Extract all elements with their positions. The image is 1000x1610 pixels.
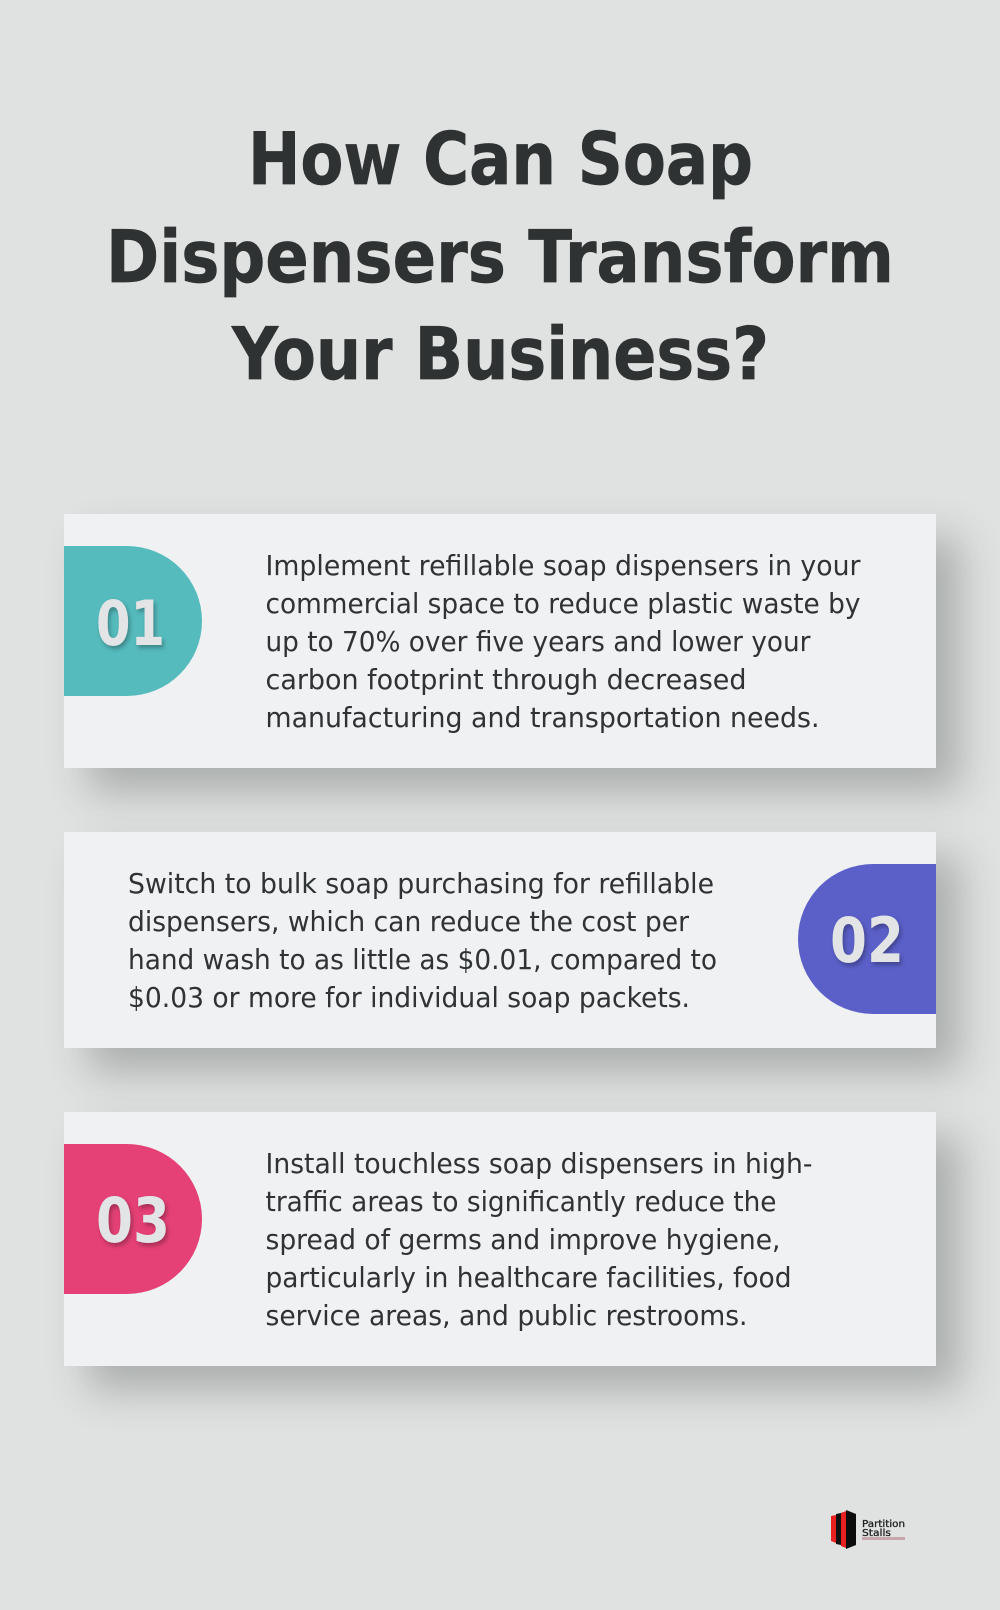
logo: Partition Stalls: Partition xyxy=(862,1519,905,1530)
title xyxy=(106,117,894,396)
text block 2: $0.03 or more for individual soap packets. xyxy=(128,981,690,1014)
badge 03: 03 xyxy=(96,1184,170,1257)
panel: card 3 xyxy=(64,1112,936,1366)
badge 02: 02 xyxy=(830,904,904,977)
text block 3: Install touchless soap dispensers in high- xyxy=(266,1147,812,1180)
text block 2 xyxy=(128,867,717,1014)
text block 1: manufacturing and transportation needs. xyxy=(266,701,820,734)
text block 1: carbon footprint through decreased xyxy=(266,663,746,696)
title: How Can Soap xyxy=(248,117,753,201)
text block 2: dispensers, which can reduce the cost per xyxy=(128,905,689,938)
badge 01 xyxy=(64,546,202,696)
badge 01: 01 xyxy=(96,587,165,660)
text block 2: Switch to bulk soap purchasing for refillable xyxy=(128,867,714,900)
panel: card 2 xyxy=(64,832,936,1048)
logo: Partition Stalls xyxy=(831,1510,905,1549)
text block 1: Implement refillable soap dispensers in your xyxy=(266,549,861,582)
title: Dispensers Transform xyxy=(106,215,894,299)
text block 3 xyxy=(266,1147,812,1332)
logo: Partition Stalls: Stalls xyxy=(862,1528,891,1539)
text block 1: commercial space to reduce plastic waste by xyxy=(266,587,860,620)
title: Your Business? xyxy=(231,312,769,396)
badge 03 xyxy=(64,1144,202,1294)
text block 1 xyxy=(266,549,861,734)
text block 3: traffic areas to significantly reduce the xyxy=(266,1185,776,1218)
text block 3: particularly in healthcare facilities, food xyxy=(266,1261,792,1294)
panel: card 1 xyxy=(64,514,936,768)
badge 02 xyxy=(798,864,936,1014)
text block 3: service areas, and public restrooms. xyxy=(266,1299,748,1332)
text block 3: spread of germs and improve hygiene, xyxy=(266,1223,780,1256)
text block 2: hand wash to as little as $0.01, compared to xyxy=(128,943,717,976)
text block 1: up to 70% over five years and lower your xyxy=(266,625,811,658)
